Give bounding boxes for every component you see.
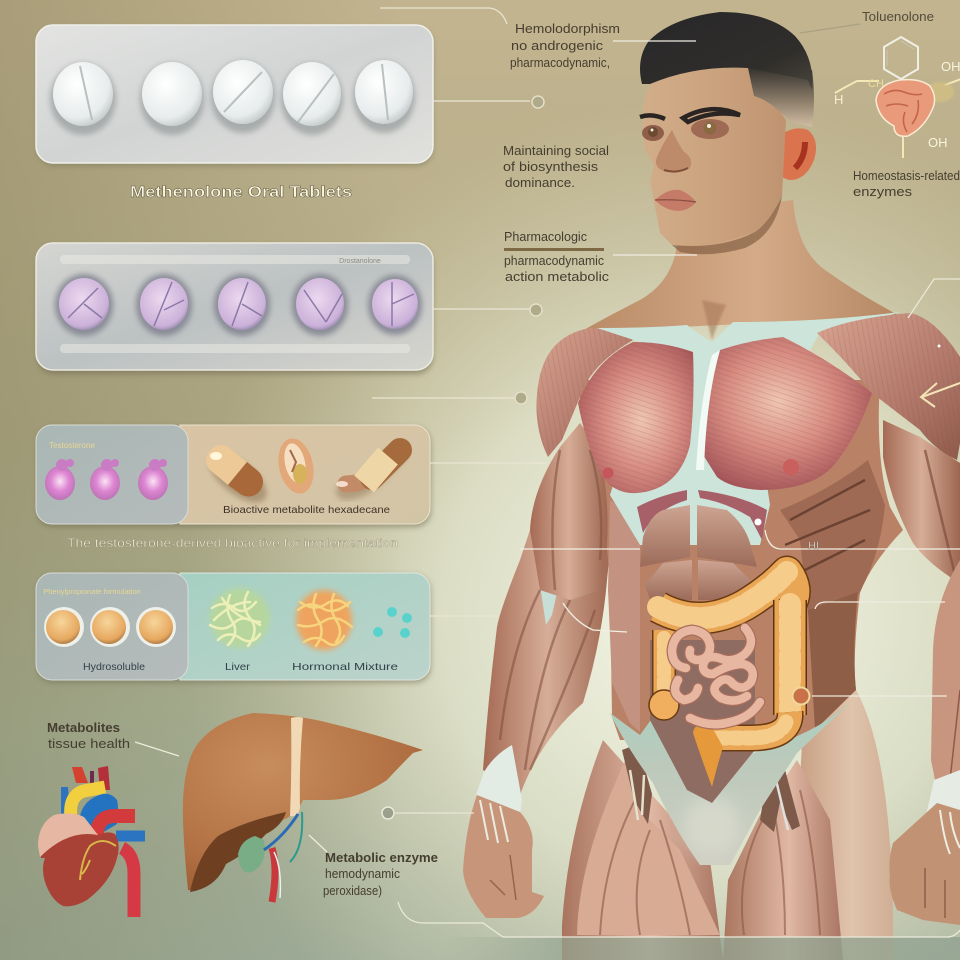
- neck and shoulders: [580, 200, 900, 332]
- lower abdominal muscle: [650, 640, 755, 803]
- lower fade over legs: [440, 937, 960, 960]
- figure: male body: [440, 12, 960, 960]
- icon: teal dots: [373, 607, 412, 638]
- eyebrows: [640, 109, 740, 122]
- icon: pink granules: [45, 459, 168, 500]
- leader: liver: [309, 835, 327, 852]
- icon: purple tablets: [55, 274, 422, 336]
- leader: deltoid callout: [908, 279, 960, 318]
- head: [640, 12, 816, 254]
- left pectoral: [578, 342, 694, 493]
- label: capsules caption: Bioactive metabolite hexadecane: [223, 504, 390, 516]
- icon: molecule with gland: OH: [941, 59, 960, 74]
- label: metabolites: tissue health: [48, 737, 130, 751]
- leader: fibre panel: [430, 615, 498, 617]
- left deltoid: [536, 328, 633, 457]
- panel: pink particles and capsules: [36, 425, 431, 527]
- label: toluene molecule title: Toluenolone: [862, 10, 934, 24]
- marker: middle connector: [372, 392, 527, 404]
- icon: orange tablets: [44, 607, 176, 647]
- ear: [776, 128, 816, 180]
- right outer skin and hip: [790, 590, 893, 960]
- left leg: [562, 740, 723, 960]
- face: [643, 68, 786, 245]
- label: metabolites: Metabolites: [47, 721, 120, 735]
- label: pharmacologic annotation: [504, 230, 609, 284]
- icon: molecule with gland: CH: [868, 78, 884, 90]
- label: top centre annotation: no androgenic: [511, 39, 603, 53]
- cecum: [649, 690, 679, 720]
- right hand: [889, 803, 960, 925]
- leader: to hair: [613, 40, 696, 42]
- icon: bent capsule: [336, 450, 400, 491]
- label: metabolic liver: [323, 851, 438, 898]
- marker: purple tablet pack connector: [433, 304, 542, 316]
- right pectoral: [702, 337, 872, 490]
- sigmoid tip: [693, 725, 723, 787]
- marker: white tablet pack connector: [433, 96, 544, 108]
- leader: left arm to muscle: [563, 603, 627, 632]
- icon: molecule with gland: OH: [928, 135, 948, 150]
- right upper arm: [883, 420, 960, 590]
- icon: heart: [38, 766, 145, 917]
- torso left-side muscle: [608, 500, 640, 732]
- torso right-side muscles: [780, 460, 885, 730]
- icon: orange fibre cluster: [296, 590, 352, 650]
- label: top centre annotation: [510, 22, 620, 70]
- sub-panel: capsules on tan: [180, 425, 430, 524]
- label: molecular annotation: dominance.: [505, 176, 575, 190]
- leader: top label curve: [380, 8, 507, 24]
- small intestine: [672, 628, 760, 724]
- label: hormone receptor annotation: [853, 169, 960, 199]
- right deltoid: [817, 313, 960, 460]
- label: hormone receptor annotation: enzymes: [853, 185, 912, 199]
- icon: white tablets: [50, 60, 415, 135]
- label: top centre annotation: Hemolodorphism: [515, 22, 620, 36]
- nostril shadow: [664, 168, 688, 172]
- large intestine: [658, 572, 794, 738]
- left wrist wrap: [476, 745, 522, 815]
- icon: arrow on deltoid: [921, 383, 960, 407]
- mouth: [655, 190, 696, 211]
- pelvic wrap: [610, 700, 853, 865]
- nipples: [602, 459, 799, 478]
- panel: orange tablets and fibres: Hydrosoluble: [83, 661, 145, 673]
- label: HI: HI: [808, 540, 819, 552]
- label: molecular annotation: [503, 144, 609, 190]
- left forearm: [483, 530, 612, 795]
- label: metabolic liver: hemodynamic: [325, 867, 400, 881]
- label: molecular annotation: Maintaining social: [503, 144, 609, 158]
- marker: liver connector: [382, 807, 474, 819]
- sub-panel: fibres on teal: [180, 573, 430, 680]
- panel: orange tablets and fibres: [36, 573, 431, 683]
- label: pharmacologic annotation: pharmacodynamic: [504, 254, 604, 268]
- marker: deltoid dot: [938, 344, 940, 348]
- right forearm: [931, 560, 960, 796]
- label: tablets title: Methenolone Oral Tablets: [130, 184, 352, 201]
- leader: metabolites: [135, 742, 179, 756]
- abdominal muscles: [637, 490, 767, 600]
- panel: orange tablets and fibres: Hormonal Mixture: [292, 661, 398, 673]
- marker: intestine node: [792, 688, 810, 704]
- label: molecular annotation: of biosynthesis: [503, 160, 598, 174]
- leader: bottom curve: [398, 902, 960, 937]
- neck hollow: [702, 300, 726, 340]
- left upper arm: [530, 423, 608, 600]
- panel: pink particles and capsules: Testosterone: [49, 441, 95, 450]
- nose: [656, 130, 691, 172]
- leader: toluene to hair: [800, 24, 860, 33]
- leader: capsule panel: [430, 462, 547, 464]
- panel: white tablet blister pack: [36, 25, 433, 201]
- leader: abdomen line: [520, 530, 960, 549]
- caption: between panels: The testosterone-derived bioactive for implementation: [67, 536, 398, 550]
- label: pharmacologic annotation: action metabolic: [505, 270, 609, 284]
- label: metabolites: [47, 721, 130, 751]
- chest membrane: [597, 312, 900, 545]
- panel: orange tablets and fibres: Liver: [225, 661, 251, 673]
- label: metabolic liver: Metabolic enzyme: [325, 851, 438, 865]
- jaw shadow: [672, 196, 782, 254]
- torso base: [575, 380, 903, 740]
- eyes: [642, 125, 664, 141]
- leader: to neck: [613, 254, 697, 256]
- leader: right abdomen: [812, 602, 947, 696]
- left hand: [463, 795, 544, 918]
- side fade: [748, 68, 814, 127]
- panel: purple tablet blister pack: [36, 243, 433, 374]
- right wrist wrap: [925, 770, 960, 820]
- pelvic highlight: [684, 795, 740, 855]
- icon: green fibre cluster: [210, 588, 270, 648]
- sternum highlight: [696, 350, 720, 470]
- label: top centre annotation: pharmacodynamic,: [510, 56, 610, 70]
- hair: [640, 12, 812, 90]
- right leg: [723, 760, 843, 960]
- sub-panel: orange tablets on grey: [36, 573, 188, 680]
- label: pharmacologic annotation: Pharmacologic: [504, 230, 587, 244]
- icon: middle capsule: [274, 435, 318, 497]
- icon: molecule with gland: H: [834, 92, 843, 107]
- icon: left capsule: [201, 444, 275, 512]
- sub-panel: pink granules on grey: [36, 425, 188, 524]
- panel: orange tablets and fibres: Phenylpropionate formulation: [43, 587, 141, 596]
- icon: liver: [183, 713, 423, 902]
- icon: molecule with gland: [834, 37, 960, 158]
- panel: purple tablet blister pack: Drostanolone: [339, 258, 381, 265]
- label: metabolic liver: peroxidase): [323, 884, 382, 898]
